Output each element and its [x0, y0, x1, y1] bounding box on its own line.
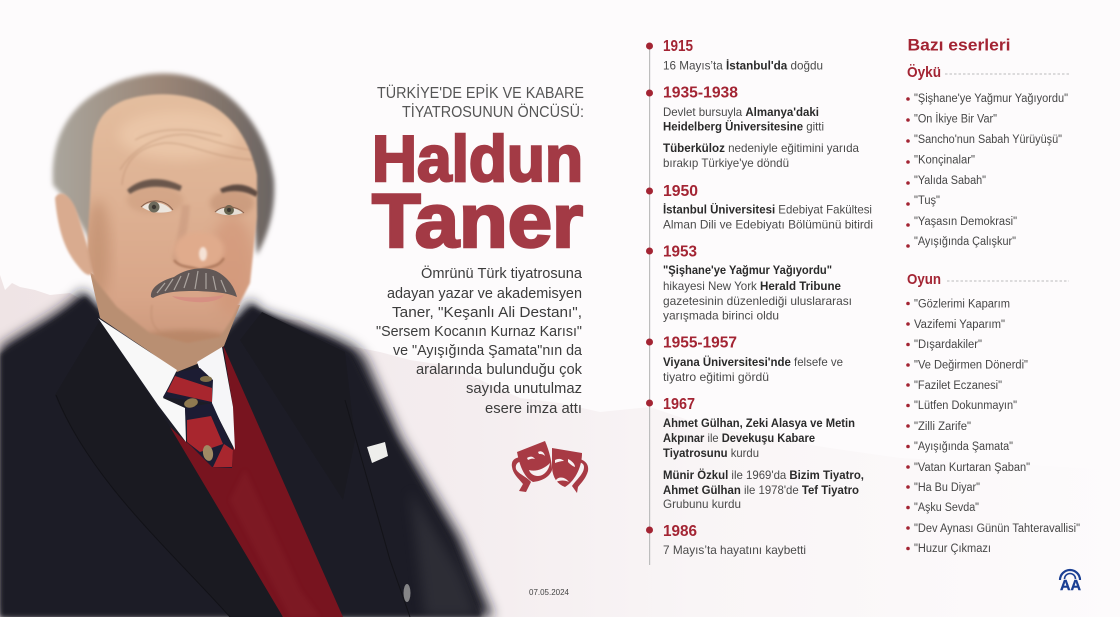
- nose side shade: [178, 205, 190, 238]
- title: Haldun: [372, 122, 583, 195]
- 1950: İstanbul Üniversitesi Edebiyat Fakültesi: [663, 202, 872, 216]
- Oyun items: "Huzur Çıkmazı: [914, 543, 991, 555]
- 1967: 1967: [663, 396, 695, 413]
- Oyun heading: Oyun: [907, 271, 941, 288]
- 1967: Ahmet Gülhan, Zeki Alasya ve Metin: [663, 416, 855, 430]
- 1950: Alman Dili ve Edebiyatı Bölümünü bitirdi: [663, 218, 873, 232]
- jacket inner: [0, 296, 482, 617]
- title: [372, 122, 583, 264]
- 1986: 1986: [663, 523, 697, 540]
- lips: [172, 295, 224, 302]
- timeline: [646, 38, 873, 565]
- intro paragraph: ve "Ayışığında Şamata"nın da: [393, 342, 583, 359]
- nose: [174, 232, 224, 270]
- eyebrow right: [220, 184, 258, 197]
- 1967: Münir Özkul ile 1969'da Bizim Tiyatro,: [663, 467, 864, 482]
- burgundy vest: [170, 345, 343, 617]
- 1935-1938: Tüberküloz nedeniyle eğitimini yarıda: [663, 141, 859, 155]
- icon: theatre masks: [512, 441, 588, 493]
- Öykü items: "Ayışığında Çalışkur": [914, 236, 1016, 248]
- lapel shading: [55, 320, 283, 617]
- shirt collar right: [197, 347, 235, 450]
- 1950: 1950: [663, 183, 698, 200]
- Oyun items: "Ha Bu Diyar": [914, 482, 980, 494]
- forehead wrinkles: [120, 130, 256, 185]
- Öykü items: "Yaşasın Demokrasi": [914, 216, 1017, 228]
- necktie: [163, 368, 233, 468]
- Öykü bullets: [906, 97, 910, 248]
- list: Oyun: [906, 271, 1080, 555]
- Oyun items: "Zilli Zarife": [914, 421, 971, 433]
- eye left: [141, 201, 173, 213]
- title: Taner: [372, 179, 583, 264]
- moustache: [151, 268, 237, 298]
- subtitle: [377, 83, 584, 121]
- intro paragraph: esere imza attı: [485, 400, 582, 417]
- Oyun bullets: [906, 302, 910, 550]
- 1935-1938: bırakıp Türkiye'ye döndü: [663, 156, 789, 170]
- 1935-1938: [646, 84, 859, 170]
- Oyun items: "Ve Değirmen Dönerdi": [914, 360, 1028, 372]
- 1986: [646, 523, 806, 557]
- Oyun items: "Fazilet Eczanesi": [914, 380, 1002, 392]
- Oyun items: "Dev Aynası Günün Tahteravallisi": [914, 523, 1080, 535]
- Öykü items: [914, 93, 1068, 248]
- intro paragraph: [376, 264, 583, 417]
- lighter jacket sleeve edge: [410, 490, 478, 617]
- 1953: yarışmada birinci oldu: [663, 308, 779, 322]
- 1953: 1953: [663, 244, 697, 260]
- shirt collar left: [98, 318, 186, 442]
- Oyun items: "Dışardakiler": [914, 339, 982, 351]
- icon: AA logo: AA: [1060, 577, 1081, 594]
- 1915: [646, 38, 823, 72]
- 1955-1957: [646, 334, 843, 384]
- 1967: Akpınar ile Devekuşu Kabare: [663, 431, 815, 445]
- 1986: 7 Mayıs’ta hayatını kaybetti: [663, 543, 806, 557]
- neck: [90, 272, 240, 372]
- intro paragraph: "Sersem Kocanın Kurnaz Karısı": [376, 323, 582, 340]
- 1935-1938: Devlet bursuyla Almanya'daki: [663, 105, 819, 119]
- Öykü items: "Konçinalar": [914, 154, 975, 166]
- pocket square: [367, 442, 388, 463]
- Öykü items: "Tuş": [914, 195, 940, 207]
- intro paragraph: Ömrünü Türk tiyatrosuna: [421, 264, 583, 282]
- mask features: [527, 451, 575, 482]
- 1955-1957: 1955-1957: [663, 334, 737, 352]
- jacket: [0, 290, 493, 617]
- subtitle: TİYATROSUNUN ÖNCÜSÜ:: [402, 102, 584, 121]
- subtitle: TÜRKİYE'DE EPİK VE KABARE: [377, 83, 584, 102]
- eyebrow left: [127, 179, 182, 194]
- 1955-1957: tiyatro eğitimi gördü: [663, 370, 769, 384]
- eye socket shade: [128, 188, 182, 212]
- 1953: "Şişhane'ye Yağmur Yağıyordu": [663, 263, 832, 277]
- moustache highlights: [157, 271, 226, 293]
- Oyun items: "Gözlerimi Kaparım: [914, 298, 1010, 310]
- 1967: [646, 396, 864, 511]
- face: [85, 85, 265, 350]
- chin shade: [152, 329, 222, 343]
- 1955-1957: Viyana Üniversitesi'nde felsefe ve: [663, 354, 843, 369]
- cheek shade: [212, 217, 252, 309]
- jacket button: [404, 584, 410, 602]
- 1967: Ahmet Gülhan ile 1978'de Tef Tiyatro: [663, 483, 859, 497]
- 1953: gazetesinin düzenlediği uluslararası: [663, 294, 852, 308]
- 1967: Tiyatrosunu kurdu: [663, 446, 759, 460]
- 1915: 16 Mayıs’ta İstanbul'da doğdu: [663, 58, 823, 72]
- list: Öykü: [906, 64, 1069, 248]
- Öykü items: "Yalıda Sabah": [914, 175, 986, 187]
- Oyun items: Vazifemi Yaparım": [914, 319, 1005, 331]
- portrait of Haldun Taner: [0, 73, 493, 617]
- 1953: hikayesi New York Herald Tribune: [663, 279, 841, 293]
- intro paragraph: sayıda unutulmaz: [466, 380, 582, 397]
- 1967: Grubunu kurdu: [663, 497, 741, 511]
- Öykü items: "Şişhane'ye Yağmur Yağıyordu": [914, 93, 1068, 105]
- ear: [55, 193, 93, 275]
- Öykü heading: Öykü: [907, 64, 941, 81]
- Oyun items: "Lütfen Dokunmayın": [914, 400, 1017, 412]
- intro paragraph: aralarında bulunduğu çok: [416, 361, 582, 378]
- date: 07.05.2024: [529, 587, 569, 597]
- works heading: Bazı eserleri: [908, 36, 1010, 54]
- intro paragraph: adayan yazar ve akademisyen: [387, 285, 582, 302]
- Oyun items: [914, 298, 1080, 555]
- 1935-1938: Heidelberg Üniversitesine gitti: [663, 118, 824, 134]
- icon: AA logo: [1060, 570, 1081, 594]
- timeline axis: [649, 45, 650, 565]
- Oyun items: "Vatan Kurtaran Şaban": [914, 462, 1030, 474]
- Öykü items: "On İkiye Bir Var": [914, 112, 997, 126]
- Oyun items: "Aşku Sevda": [914, 502, 979, 514]
- 1935-1938: 1935-1938: [663, 84, 738, 102]
- eye right: [215, 205, 244, 215]
- 1953: [646, 244, 852, 322]
- 1950: [646, 183, 873, 232]
- background mountain band: [0, 275, 1120, 617]
- 1915: 1915: [663, 38, 693, 55]
- hair: [53, 73, 274, 255]
- Oyun items: "Ayışığında Şamata": [914, 441, 1013, 453]
- Öykü items: "Sancho'nun Sabah Yürüyüşü": [914, 134, 1062, 146]
- intro paragraph: Taner, "Keşanlı Ali Destanı",: [392, 304, 582, 321]
